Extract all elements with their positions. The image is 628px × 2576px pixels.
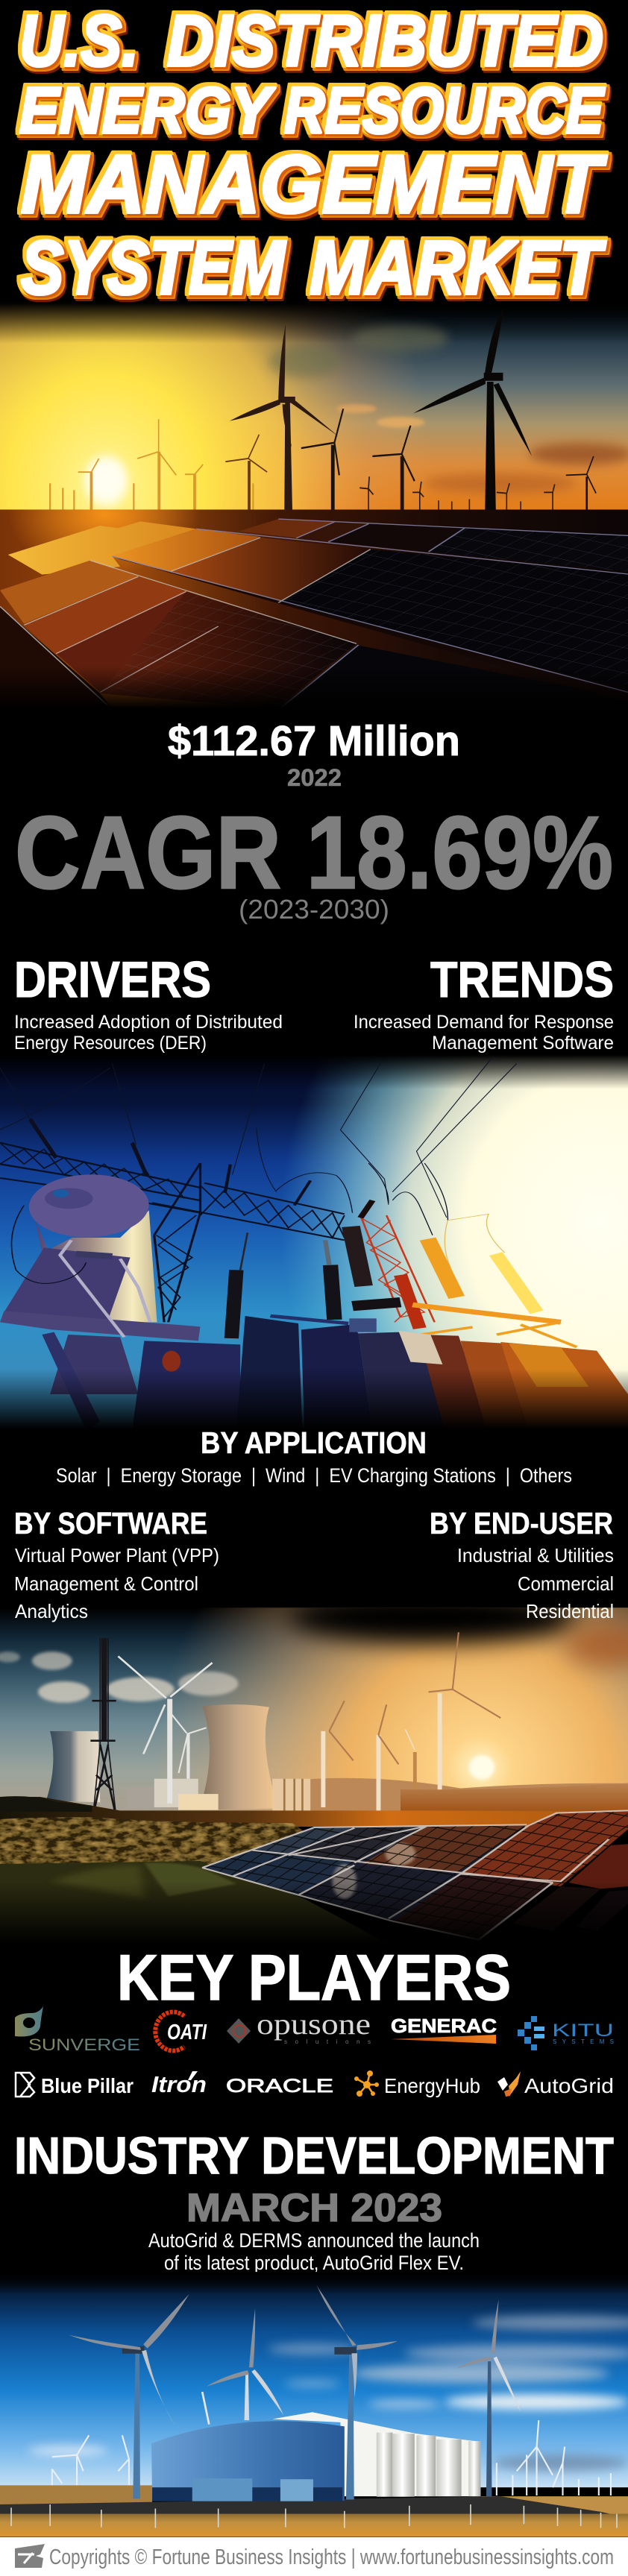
fence	[11, 2504, 617, 2528]
panel: by end-user: Industrial & Utilities	[457, 1544, 614, 1566]
photo: cooling towers, turbines and solar field	[0, 1590, 628, 1948]
clouds	[28, 2315, 628, 2471]
logo: EnergyHub	[354, 2070, 480, 2097]
base year: 2022	[287, 764, 342, 791]
sky, towers and turbines	[0, 1607, 628, 1810]
lattice mast	[90, 1638, 116, 1817]
panel: drivers: DRIVERS	[14, 951, 211, 1008]
title: MANAGEMENT	[21, 139, 607, 230]
small turbines	[52, 2420, 611, 2495]
red lattice tower	[360, 1215, 435, 1322]
white turbines	[118, 1656, 213, 1804]
footer	[0, 2537, 628, 2576]
title	[19, 0, 607, 310]
photo: electrical substation	[0, 1055, 628, 1432]
logo: AutoGrid	[497, 2071, 614, 2097]
hills	[272, 1778, 628, 1813]
blue building	[151, 2421, 345, 2501]
photo: wind turbines and solar panels at sunset	[0, 303, 628, 708]
panel: by application: BY APPLICATION	[201, 1426, 427, 1460]
large turbine right	[413, 307, 532, 511]
fade	[0, 1881, 628, 1948]
logo: Blue Pillar	[16, 2073, 134, 2097]
logo: Kitu Systems: KITU	[552, 2021, 614, 2041]
date: MARCH 2023	[186, 2186, 442, 2230]
logo: opusone: opusone	[257, 2007, 371, 2041]
panel: trends	[354, 951, 614, 1054]
panel: by end-user	[430, 1506, 614, 1622]
panel: by end-user: Residential	[526, 1600, 614, 1622]
sun	[469, 1755, 494, 1780]
logo: Generac: GENERAC	[391, 2015, 497, 2037]
logo: Blue Pillar: Blue Pillar	[41, 2074, 134, 2097]
panel: by software: Management & Control	[14, 1572, 198, 1595]
transformer blocks	[132, 1316, 628, 1430]
ground	[0, 2485, 152, 2504]
development description: of its latest product, AutoGrid Flex EV.	[164, 2252, 464, 2274]
logo: Kitu Systems	[518, 2016, 614, 2050]
panel: drivers	[14, 951, 283, 1054]
buildings	[154, 1779, 310, 1810]
insulators	[231, 1200, 577, 1347]
heading: key players: KEY PLAYERS	[117, 1942, 511, 2014]
cooling towers	[46, 1731, 100, 1802]
title: MARKET	[310, 225, 606, 310]
logo: EnergyHub: EnergyHub	[384, 2074, 480, 2097]
bushes	[0, 1817, 304, 1866]
panel: trends: Increased Demand for Response	[354, 1012, 614, 1033]
forecast period: (2023-2030)	[239, 894, 389, 925]
logo: OATI	[155, 2012, 207, 2050]
panel: drivers: Energy Resources (DER)	[14, 1033, 207, 1054]
logo: Kitu Systems: SYSTEMS	[553, 2038, 614, 2045]
large turbines	[69, 2285, 521, 2500]
logo: OATI: OATI	[167, 2021, 207, 2044]
bottom fade	[0, 1370, 628, 1432]
panel: by software	[14, 1506, 219, 1622]
market size value: $112.67 Million	[168, 717, 460, 765]
logo: AutoGrid: AutoGrid	[524, 2074, 614, 2097]
photo: wind farm and energy storage building	[0, 2272, 628, 2537]
title: SYSTEM	[21, 225, 286, 310]
logo: Fortune Business Insights	[15, 2544, 45, 2568]
panel: by software: BY SOFTWARE	[14, 1506, 207, 1540]
sun	[85, 456, 127, 503]
large turbine center	[230, 324, 339, 511]
substation equipment	[0, 1163, 628, 1432]
logo: Oracle: ORACLE	[226, 2076, 333, 2097]
title: U.S.	[19, 0, 139, 81]
tree line	[0, 1797, 628, 1827]
smaller turbines	[225, 409, 596, 511]
logo: Sunverge: SUNVERGE	[28, 2035, 140, 2054]
sky with turbines	[0, 303, 628, 515]
logo: Itron: Itron	[151, 2071, 207, 2097]
panel: drivers: Increased Adoption of Distributed	[14, 1012, 283, 1033]
panel: by software: Analytics	[15, 1600, 88, 1622]
panel: by application	[56, 1426, 572, 1487]
panel: trends: Management Software	[432, 1033, 614, 1054]
development description: AutoGrid & DERMS announced the launch	[148, 2229, 480, 2252]
top fade	[0, 2272, 628, 2294]
clouds	[0, 1651, 239, 1703]
white silo hall	[272, 2412, 480, 2496]
logo: Sunverge	[15, 2006, 140, 2054]
development description	[148, 2229, 480, 2274]
logo: opusone: solutions	[284, 2038, 371, 2045]
panel: by software: Virtual Power Plant (VPP)	[15, 1544, 219, 1566]
panel: by end-user: Commercial	[518, 1572, 614, 1595]
truss	[0, 1163, 505, 1322]
tank	[0, 1171, 200, 1430]
logo: opusone	[227, 2007, 371, 2045]
dark storm cloud	[289, 1590, 577, 1644]
market size value	[168, 717, 460, 791]
meadow	[0, 1861, 365, 1933]
solar array	[202, 1810, 628, 1940]
sky and overhead wires	[0, 1055, 628, 1429]
ground and solar panels	[0, 509, 628, 708]
title: ENERGY	[19, 75, 275, 147]
landscape and solar array	[0, 1783, 628, 1948]
